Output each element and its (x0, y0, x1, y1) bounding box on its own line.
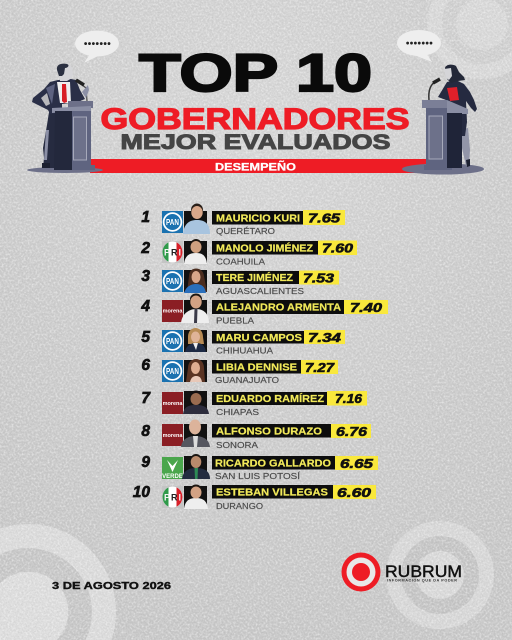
state: AGUASCALIENTES (216, 287, 304, 296)
rank 2: 2 (140, 240, 150, 257)
speech bubble right: ••••••• (406, 38, 433, 50)
party logo PAN (162, 211, 183, 233)
name bar: MARU CAMPOS (216, 333, 302, 344)
red banner: desempeño (90, 159, 426, 174)
party logo VERDE: VERDE (162, 474, 183, 480)
party logo PAN: PAN (166, 336, 179, 346)
photo Alfonso Durazo (181, 420, 210, 447)
name bar: LIBIA DENNISE (216, 362, 297, 374)
state: CHIHUAHUA (216, 346, 274, 356)
party logo PRI: PRI (164, 492, 181, 502)
photo Esteban Villegas (184, 484, 208, 509)
row 2 (140, 239, 357, 266)
photo Ricardo Gallardo (182, 454, 210, 479)
party logo PAN (162, 360, 183, 382)
microphone (76, 80, 87, 101)
party logo PAN: PAN (166, 217, 179, 227)
state: GUANAJUATO (215, 376, 279, 385)
row 8 (141, 420, 371, 450)
row 3 (141, 268, 339, 296)
party logo morena (162, 424, 183, 446)
party logo PRI (162, 241, 183, 263)
jacket (32, 79, 85, 114)
speaker left: man at podium (27, 30, 119, 173)
rank 3: 3 (141, 268, 150, 285)
rank 6: 6 (141, 357, 150, 374)
row 10 (133, 484, 376, 511)
score: 7.53 (303, 270, 335, 286)
rank 10: 10 (133, 484, 150, 501)
photo Maru Campos (184, 328, 207, 352)
podium (422, 100, 447, 108)
name bar: EDUARDO RAMÍREZ (216, 392, 324, 405)
row 4 (140, 294, 388, 326)
jacket (438, 80, 477, 136)
score (303, 210, 345, 226)
row 5 (141, 328, 345, 356)
photo Tere Jiménez (184, 268, 207, 293)
name bar: MANOLO JIMÉNEZ (216, 242, 313, 254)
party logo PRI: PRI (164, 248, 181, 258)
name bar: MAURICIO KURI (216, 214, 300, 224)
party logo PRI (162, 486, 183, 508)
state: QUERÉTARO (216, 227, 275, 236)
photo Alejandro Armenta (181, 294, 209, 323)
photo Libia Dennise (184, 359, 207, 382)
score (344, 300, 388, 315)
microphone (429, 81, 436, 100)
name bar (212, 211, 303, 224)
rank 8: 8 (141, 423, 150, 440)
rank 1: 1 (141, 209, 150, 226)
state: SAN LUIS POTOSÍ (215, 472, 301, 481)
speech bubble right (397, 30, 441, 62)
score (333, 485, 376, 500)
state: CHIAPAS (216, 408, 259, 417)
state: SONORA (216, 441, 259, 450)
row 9 (141, 454, 378, 481)
name bar: ESTEBAN VILLEGAS (216, 488, 328, 498)
date: 3 DE AGOSTO 2026 (52, 580, 171, 592)
party logo morena: morena (163, 433, 183, 439)
decorative circle bottom right (386, 521, 494, 629)
speech bubble left: ••••••• (84, 39, 111, 50)
name bar (212, 300, 344, 314)
decorative circle bottom left (0, 524, 116, 640)
podium (68, 101, 93, 109)
row 7 (141, 390, 367, 417)
name bar (212, 424, 331, 438)
score: 7.34 (308, 330, 342, 345)
rank 5: 5 (141, 329, 150, 346)
logo: Rubrum (342, 552, 462, 592)
name bar (212, 241, 318, 254)
decorative circle top right (427, 0, 512, 79)
row 6 (141, 357, 338, 385)
party logo PAN: PAN (166, 366, 179, 376)
score: 7.27 (305, 360, 335, 375)
legs (458, 128, 470, 166)
score (318, 240, 357, 256)
name bar: TERE JIMÉNEZ (216, 271, 293, 284)
speech bubble left (75, 30, 119, 63)
score (327, 391, 367, 406)
score (335, 456, 378, 471)
heading: gobernadores: GOBERNADORES (100, 103, 410, 136)
name bar: ALFONSO DURAZO (216, 426, 322, 438)
state: COAHUILA (216, 258, 266, 266)
party logo morena (162, 300, 183, 322)
head (445, 65, 465, 83)
score: 6.76 (336, 424, 368, 439)
red banner: desempeño: DESEMPEÑO (215, 160, 297, 174)
state: DURANGO (216, 502, 263, 511)
name bar (212, 485, 333, 498)
logo tagline: INFORMACIÓN QUE DA PODER (387, 578, 457, 582)
score: 6.65 (340, 456, 374, 471)
head (58, 64, 73, 81)
score: 7.16 (335, 391, 363, 406)
logo target icon (342, 552, 380, 592)
row 1 (141, 204, 345, 236)
score (299, 270, 339, 286)
name bar: RICARDO GALLARDO (215, 458, 331, 470)
score: 7.65 (308, 210, 341, 226)
rank 9: 9 (141, 454, 150, 471)
score (304, 330, 345, 345)
photo Manolo Jiménez (184, 239, 207, 264)
rank 7: 7 (141, 390, 151, 407)
score: 7.60 (322, 240, 354, 256)
score (331, 424, 371, 439)
photo Mauricio Kuri (183, 204, 210, 234)
score: 6.60 (337, 485, 372, 500)
photo Eduardo Ramírez (183, 390, 209, 414)
party logo VERDE (162, 457, 183, 480)
state: PUEBLA (216, 316, 255, 326)
party logo morena (162, 392, 183, 414)
rank 4: 4 (140, 298, 150, 315)
party logo morena: morena (163, 401, 183, 407)
name bar (212, 360, 301, 374)
heading: mejor evaluados: MEJOR EVALUADOS (120, 130, 390, 154)
title: TOP 10 (139, 44, 372, 103)
logo wordmark: RUBRUM (385, 563, 462, 581)
party logo morena: morena (163, 308, 183, 314)
party logo PAN: PAN (166, 276, 179, 286)
score (301, 360, 338, 375)
party logo PAN (162, 270, 183, 292)
legs (43, 112, 60, 168)
name bar: ALEJANDRO ARMENTA (216, 302, 341, 314)
score: 7.40 (350, 300, 383, 315)
party logo PAN (162, 330, 183, 352)
speaker right: woman at podium (397, 30, 484, 174)
